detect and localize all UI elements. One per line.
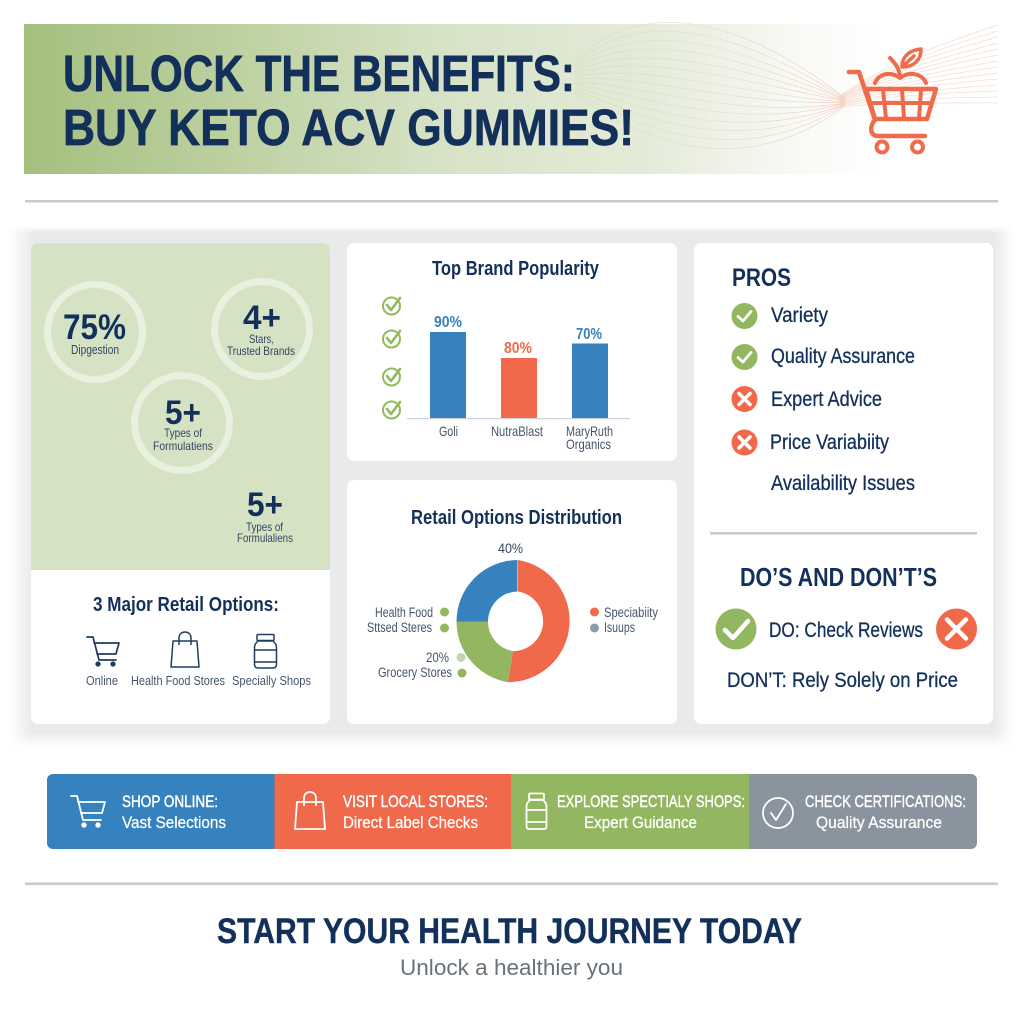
retail option labels: Specially Shops bbox=[232, 673, 311, 688]
retail option labels: Health Food Stores bbox=[131, 673, 225, 688]
bar chart bbox=[407, 314, 630, 452]
action: visit local stores bbox=[295, 792, 488, 832]
donut chart: 40% bbox=[498, 540, 523, 556]
action: shop online bbox=[71, 792, 226, 832]
retail option labels bbox=[86, 673, 311, 688]
do's and don'ts content: DO: Check Reviews bbox=[769, 618, 923, 642]
pros list bbox=[732, 303, 915, 495]
stat: 4+ stars: 4+ bbox=[243, 299, 281, 337]
action: shop online: Vast Selections bbox=[122, 813, 226, 832]
footer heading: START YOUR HEALTH JOURNEY TODAY bbox=[217, 912, 802, 951]
bar chart: 90% bbox=[434, 314, 462, 331]
stat: 5+ types: Types of bbox=[246, 520, 284, 534]
donut chart bbox=[456, 540, 570, 682]
stat: 5+ types: Formulaliens bbox=[237, 531, 293, 545]
title: UNLOCK THE BENEFITS: bbox=[63, 45, 575, 102]
donut legend right: Isuups bbox=[604, 620, 635, 635]
chart heading: Top Brand Popularity bbox=[432, 257, 599, 280]
action: visit local stores: VISIT LOCAL STORES: bbox=[343, 792, 488, 811]
heading: do's and don'ts: DO’S AND DON’T’S bbox=[740, 562, 937, 592]
heading: retail options: 3 Major Retail Options: bbox=[93, 593, 279, 616]
icon: shopping bag bbox=[171, 632, 199, 667]
action: shop online: SHOP ONLINE: bbox=[122, 792, 218, 811]
pros list: Price Variabiity bbox=[770, 431, 889, 454]
donut legend left: 20% bbox=[426, 650, 449, 665]
donut legend left: Sttsed Steres bbox=[367, 620, 432, 635]
stat: 75% digestion: 75% bbox=[63, 308, 126, 347]
pros list: Availability Issues bbox=[771, 472, 915, 495]
action: check certifications bbox=[763, 792, 966, 832]
bar chart: Goli bbox=[439, 423, 458, 439]
stat: 4+ stars bbox=[214, 282, 310, 376]
action: visit local stores: Direct Label Checks bbox=[343, 813, 478, 832]
stat: 4+ stars: Trusted Brands bbox=[227, 344, 295, 358]
panel: top brand popularity bbox=[347, 243, 677, 461]
do's and don'ts content bbox=[716, 608, 977, 692]
stat: 5+ types circled bbox=[134, 376, 230, 470]
action: explore specialty shops bbox=[526, 792, 745, 832]
action: check certifications: Quality Assurance bbox=[816, 813, 942, 832]
bar chart: 80% bbox=[504, 340, 532, 357]
stat: 5+ types circled: Types of bbox=[164, 426, 203, 440]
donut legend right bbox=[590, 605, 658, 635]
bar chart: Organics bbox=[566, 436, 611, 452]
icon: check column bbox=[383, 298, 400, 418]
panel: pros and do's and don'ts bbox=[694, 243, 993, 724]
footer tagline: Unlock a healthier you bbox=[400, 955, 623, 980]
pros list: Variety bbox=[771, 304, 828, 327]
panel: key stats and retail options bbox=[31, 243, 330, 724]
stat: 4+ stars: Stars, bbox=[249, 332, 274, 346]
do's and don'ts content: DON’T: Rely Solely on Price bbox=[727, 668, 958, 692]
donut legend left: Health Food bbox=[375, 605, 433, 620]
panel: retail options distribution bbox=[347, 480, 677, 724]
icon: shopping cart with apple bbox=[849, 49, 936, 152]
retail option labels: Online bbox=[86, 673, 118, 688]
bar chart: NutraBlast bbox=[491, 423, 543, 439]
heading: pros: PROS bbox=[732, 264, 791, 292]
icon: online cart bbox=[87, 637, 119, 666]
donut legend right: Speciabiity bbox=[604, 605, 658, 620]
stat: 5+ types circled: 5+ bbox=[165, 394, 201, 432]
title: BUY KETO ACV GUMMIES! bbox=[63, 99, 634, 156]
stat: 75% digestion: Dipgestion bbox=[71, 343, 119, 357]
bar chart: MaryRuth bbox=[566, 423, 613, 439]
action: explore specialty shops: EXPLORE SPECTIALY SHOPS: bbox=[557, 792, 745, 811]
bar chart: 70% bbox=[576, 326, 602, 343]
action: check certifications: CHECK CERTIFICATIONS: bbox=[805, 792, 966, 811]
donut legend left: Grocery Stores bbox=[378, 665, 452, 680]
pros list: Expert Advice bbox=[771, 388, 882, 411]
pros list: Quality Assurance bbox=[771, 345, 915, 368]
donut legend left bbox=[367, 605, 466, 680]
stat: 5+ types circled: Formulatiens bbox=[153, 439, 213, 453]
stat: 5+ types bbox=[237, 486, 293, 545]
icon: bottle bbox=[254, 634, 276, 668]
call to action strip bbox=[47, 774, 977, 849]
header banner bbox=[24, 22, 1000, 174]
title bbox=[63, 45, 634, 156]
stat: 5+ types: 5+ bbox=[247, 486, 283, 524]
chart heading: Retail Options Distribution bbox=[411, 506, 622, 529]
action: explore specialty shops: Expert Guidance bbox=[584, 813, 697, 832]
stat: 75% digestion bbox=[48, 284, 142, 380]
